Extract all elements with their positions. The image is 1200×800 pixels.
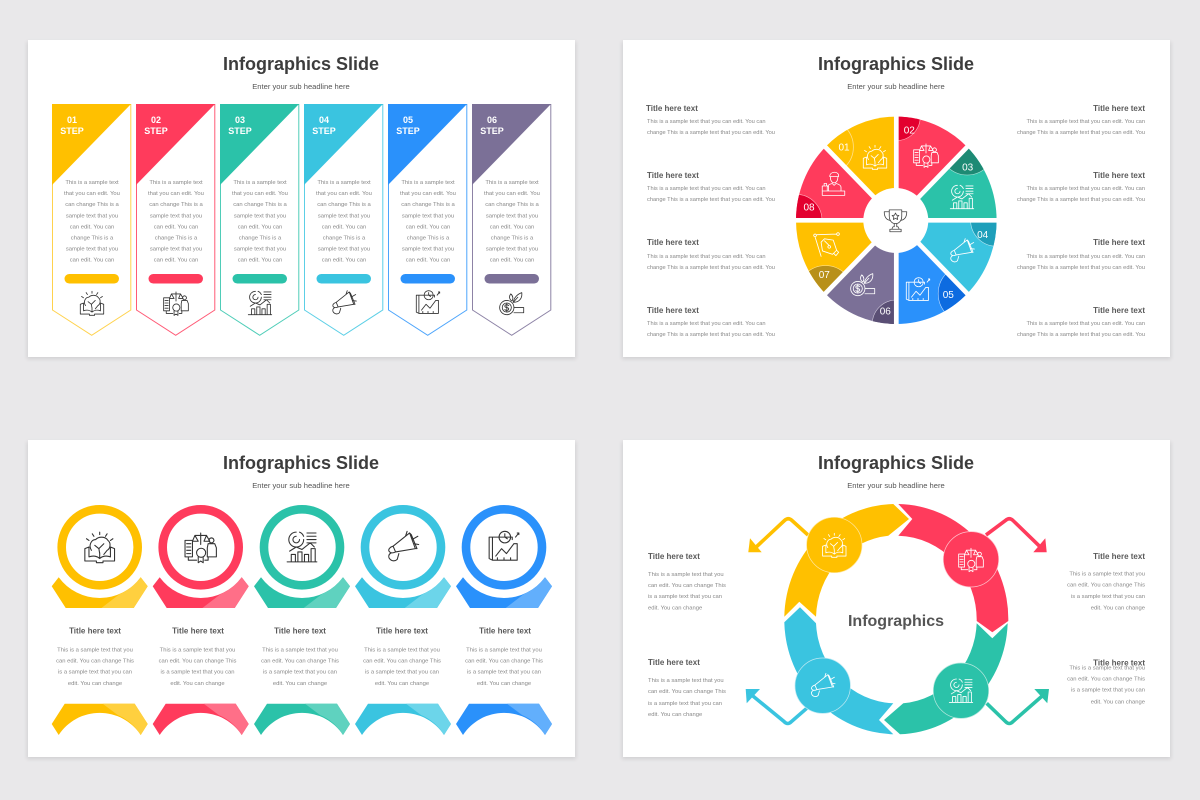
column 1 <box>52 509 148 735</box>
column 1: can edit. You can change This <box>56 658 134 664</box>
card 02: sample text that you <box>150 246 202 252</box>
card 02: sample text that you <box>150 213 202 219</box>
card 05: sample text that you <box>402 213 454 219</box>
right text block 3 <box>1017 238 1145 271</box>
column 2: edit. You can change <box>170 681 225 687</box>
text block top left: can edit. You can change This <box>648 583 726 589</box>
right text block 1: change This is a sample text that you can edit. You <box>1017 130 1145 136</box>
node: book <box>807 517 862 573</box>
card 03: can edit. You can <box>238 258 282 264</box>
text block bottom right: Title here text <box>1093 658 1145 667</box>
left text block 4: This is a sample text that you can edit. You can <box>647 321 766 327</box>
card 01: can edit. You can <box>70 224 114 230</box>
ring segment: red <box>898 504 1008 632</box>
left text block 3: This is a sample text that you can edit. You can <box>647 254 766 260</box>
text block bottom right: is a sample text that you can <box>1071 688 1145 694</box>
card 02: can edit. You can <box>154 258 198 264</box>
card 03: can change This is a <box>233 202 287 208</box>
card 04: 04 <box>319 115 329 125</box>
text block top left: is a sample text that you can <box>648 594 722 600</box>
right text block 3: Title here text <box>1093 238 1145 247</box>
right text block 2: This is a sample text that you can edit. You can <box>1026 186 1145 192</box>
text block top left <box>648 552 726 612</box>
panel: five circle slide <box>28 440 575 757</box>
column 2: Title here text <box>172 626 224 636</box>
card 01: sample text that you <box>66 246 118 252</box>
text block bottom left: This is a sample text that you <box>648 678 724 684</box>
center label: Infographics <box>848 613 944 630</box>
segment 08: 08 <box>803 202 815 213</box>
card 05: can edit. You can <box>406 258 450 264</box>
arrow: red <box>986 519 1047 552</box>
segment 02: 02 <box>904 126 915 137</box>
column 3: Title here text <box>274 626 326 636</box>
panel: circular arrows slide <box>623 440 1170 757</box>
column 1: edit. You can change <box>68 681 122 687</box>
column 5: This is a sample text that you <box>466 647 542 653</box>
text block top right <box>1067 552 1145 611</box>
card 03: can edit. You can <box>238 224 282 230</box>
card 01: that you can edit. You <box>64 191 120 197</box>
card 02: STEP <box>144 126 168 136</box>
card 01: This is a sample text <box>65 180 119 186</box>
right text block 2 <box>1017 171 1145 203</box>
column 5: Title here text <box>479 626 531 636</box>
ring segment: yellow <box>784 504 909 617</box>
subtitle: Enter your sub headline here <box>252 82 350 91</box>
card 01 <box>52 104 131 335</box>
text block bottom right: can edit. You can change This <box>1067 676 1145 682</box>
segment 04: 04 <box>977 230 989 241</box>
card 02 <box>136 104 215 335</box>
card 03: sample text that you <box>234 246 286 252</box>
column 4: Title here text <box>376 626 428 636</box>
segment 06: 06 <box>880 306 891 317</box>
subtitle: Enter your sub headline here <box>847 481 945 490</box>
segment 08 <box>796 148 872 218</box>
right text block 4: Title here text <box>1093 306 1145 315</box>
column 5: edit. You can change <box>477 681 531 687</box>
column 3: is a sample text that you can <box>263 669 337 675</box>
left text block 3: change This is a sample text that you can edit. You <box>647 265 775 271</box>
card 05: STEP <box>396 126 420 136</box>
card 06: sample text that you <box>486 213 538 219</box>
card 04: This is a sample text <box>317 180 371 186</box>
text block bottom left: is a sample text that you can <box>648 701 722 707</box>
left text block 2: Title here text <box>647 171 699 180</box>
text block bottom right <box>1067 658 1145 705</box>
card 05: This is a sample text <box>401 180 455 186</box>
card 04: that you can edit. You <box>316 191 372 197</box>
title: Infographics Slide <box>223 54 379 74</box>
column 4: edit. You can change <box>375 681 429 687</box>
card 05: sample text that you <box>402 246 454 252</box>
card 06: This is a sample text <box>485 180 539 186</box>
card 03: sample text that you <box>234 213 286 219</box>
right text block 1: Title here text <box>1093 104 1145 113</box>
card 03: change This is a <box>239 236 282 242</box>
column 3: can edit. You can change This <box>261 658 339 664</box>
node: chart <box>933 663 989 718</box>
card 06: change This is a <box>491 236 534 242</box>
card 04: sample text that you <box>318 213 370 219</box>
column 2 <box>153 509 249 735</box>
card 05: can change This is a <box>401 202 455 208</box>
text block top right: This is a sample text that you <box>1069 571 1145 577</box>
column 4 <box>355 509 451 735</box>
text block bottom left: can edit. You can change This <box>648 689 726 695</box>
segment 05 <box>898 245 966 324</box>
text block bottom left: Title here text <box>648 658 700 667</box>
column 5: is a sample text that you can <box>467 669 541 675</box>
card 05: that you can edit. You <box>400 191 456 197</box>
column 3: edit. You can change <box>273 681 327 687</box>
card 06: sample text that you <box>486 246 538 252</box>
card 06: can change This is a <box>485 202 539 208</box>
card 01: 01 <box>67 115 77 125</box>
right text block 1 <box>1017 104 1145 136</box>
left text block 4 <box>647 306 775 338</box>
segment 07 <box>796 222 872 292</box>
left text block 2: This is a sample text that you can edit. You can <box>647 186 766 192</box>
card 03: This is a sample text <box>233 180 287 186</box>
left text block 1: This is a sample text that you can edit. You can <box>647 119 766 125</box>
card 03 <box>220 104 299 335</box>
text block top left: edit. You can change <box>648 606 702 612</box>
card 01: change This is a <box>71 236 114 242</box>
left text block 1 <box>646 104 775 136</box>
column 4: This is a sample text that you <box>364 647 440 653</box>
ring segment: teal <box>884 623 1008 734</box>
subtitle: Enter your sub headline here <box>847 82 945 91</box>
card 06: 06 <box>487 115 497 125</box>
left text block 2 <box>647 171 775 203</box>
card 04 <box>304 104 383 335</box>
column 5 <box>456 509 552 735</box>
right text block 3: change This is a sample text that you can edit. You <box>1017 265 1145 271</box>
ring segment: cyan <box>784 607 893 734</box>
wheel chart <box>796 116 997 324</box>
column 2: This is a sample text that you <box>160 647 235 653</box>
column 3 <box>254 509 350 735</box>
segment 04 <box>920 222 996 292</box>
left text block 4: change This is a sample text that you can edit. You <box>647 332 775 338</box>
card 01: STEP <box>60 126 84 136</box>
card 06: STEP <box>480 126 504 136</box>
card 03: that you can edit. You <box>232 191 288 197</box>
card 05: can edit. You can <box>406 224 450 230</box>
card 05 <box>388 104 467 335</box>
card 01: can edit. You can <box>70 258 114 264</box>
card 02: 02 <box>151 115 161 125</box>
panel: eight segment wheel slide <box>623 40 1170 357</box>
card 06 <box>472 104 551 335</box>
node: megaphone <box>795 658 850 713</box>
card 02: can edit. You can <box>154 224 198 230</box>
right text block 4: This is a sample text that you can edit. You can <box>1026 321 1145 327</box>
card 06: can edit. You can <box>490 258 534 264</box>
arrow: cyan <box>746 689 807 724</box>
text block bottom right: This is a sample text that you <box>1069 665 1145 671</box>
left text block 3: Title here text <box>647 238 699 247</box>
arrow: teal <box>987 689 1049 724</box>
column 1: This is a sample text that you <box>57 647 133 653</box>
card 06: that you can edit. You <box>484 191 540 197</box>
card 05: change This is a <box>407 236 450 242</box>
right text block 4 <box>1017 306 1145 338</box>
text block top left: This is a sample text that you <box>648 572 724 578</box>
segment 06 <box>827 246 894 324</box>
left text block 2: change This is a sample text that you can edit. You <box>647 197 775 203</box>
segment 05: 05 <box>943 290 954 301</box>
card 04: sample text that you <box>318 246 370 252</box>
card 03: 03 <box>235 115 245 125</box>
column 5: can edit. You can change This <box>465 658 543 664</box>
segment 01 <box>827 116 894 196</box>
title: Infographics Slide <box>818 54 974 74</box>
column 1: Title here text <box>69 626 121 636</box>
text block top left: Title here text <box>648 552 700 561</box>
column 3: This is a sample text that you <box>262 647 338 653</box>
column 4: is a sample text that you can <box>365 669 439 675</box>
card 02: that you can edit. You <box>148 191 204 197</box>
column 2: can edit. You can change This <box>159 658 237 664</box>
node: award <box>943 532 999 587</box>
left text block 4: Title here text <box>647 306 699 315</box>
text block bottom right: edit. You can change <box>1091 699 1145 705</box>
text block top right: Title here text <box>1093 552 1145 561</box>
title: Infographics Slide <box>223 453 379 473</box>
subtitle: Enter your sub headline here <box>252 481 350 490</box>
right text block 2: Title here text <box>1093 171 1145 180</box>
segment 02 <box>898 116 966 196</box>
column 1: is a sample text that you can <box>58 669 132 675</box>
right text block 4: change This is a sample text that you can edit. You <box>1017 332 1145 338</box>
card 01: sample text that you <box>66 213 118 219</box>
right text block 2: change This is a sample text that you can edit. You <box>1017 197 1145 203</box>
left text block 1: Title here text <box>646 104 698 113</box>
card 03: STEP <box>228 126 252 136</box>
left text block 3 <box>647 238 775 271</box>
left text block 1: change This is a sample text that you can edit. You <box>647 130 775 136</box>
segment 07: 07 <box>819 270 830 281</box>
text block bottom left <box>648 658 726 718</box>
panel: step cards slide <box>28 40 575 357</box>
card 04: can edit. You can <box>322 224 366 230</box>
column 4: can edit. You can change This <box>363 658 441 664</box>
icon: trophy <box>884 210 907 232</box>
card 01: can change This is a <box>65 202 119 208</box>
arrow: yellow <box>748 519 808 552</box>
right text block 3: This is a sample text that you can edit. You can <box>1026 254 1145 260</box>
text block top right: edit. You can change <box>1091 605 1145 611</box>
text block bottom left: edit. You can change <box>648 712 702 718</box>
card 04: change This is a <box>323 236 366 242</box>
right text block 1: This is a sample text that you can edit. You can <box>1026 119 1145 125</box>
text block top right: is a sample text that you can <box>1071 594 1145 600</box>
segment 03 <box>920 148 997 218</box>
card 02: can change This is a <box>149 202 203 208</box>
card 06: can edit. You can <box>490 224 534 230</box>
card 05: 05 <box>403 115 413 125</box>
card 02: change This is a <box>155 236 198 242</box>
column 2: is a sample text that you can <box>160 669 235 675</box>
card 04: can edit. You can <box>322 258 366 264</box>
card 04: STEP <box>312 126 336 136</box>
text block top right: can edit. You can change This <box>1067 583 1145 589</box>
segment 01: 01 <box>838 142 850 153</box>
card 02: This is a sample text <box>149 180 203 186</box>
segment 03: 03 <box>962 162 974 173</box>
title: Infographics Slide <box>818 453 974 473</box>
card 04: can change This is a <box>317 202 371 208</box>
